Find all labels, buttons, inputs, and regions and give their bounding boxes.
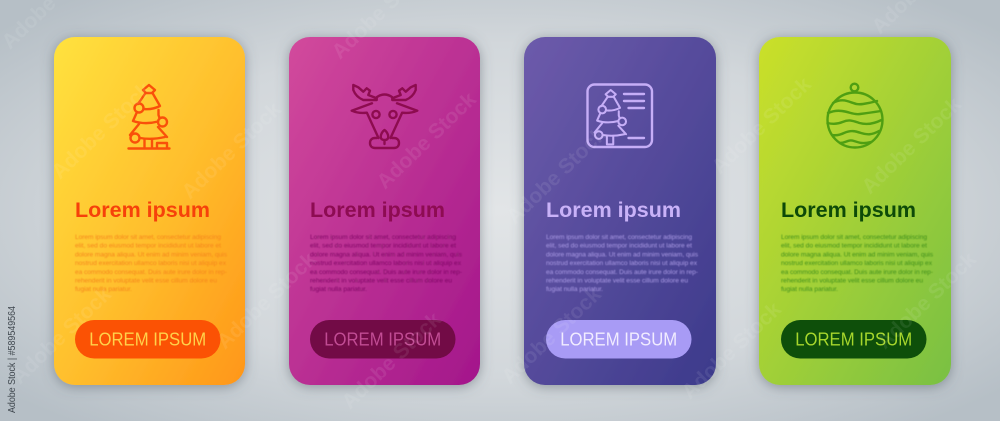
heading: Lorem ipsum <box>75 199 210 222</box>
text block: Lorem ipsum dolor sit amet, consectetur adipiscing <box>310 234 456 241</box>
text block: fugiat nulla pariatur. <box>75 286 132 293</box>
text block: elit, sed do eiusmod tempor incididunt ut labore et <box>781 243 927 250</box>
watermark: Adobe Stock pattern: Adobe Stock <box>372 88 481 194</box>
text block: elit, sed do eiusmod tempor incididunt ut labore et <box>75 243 221 250</box>
text block: nostrud exercitation ullamco laboris nisi ut aliquip ex <box>781 260 933 267</box>
button <box>75 320 220 358</box>
watermark: Adobe Stock pattern: Adobe Stock <box>857 93 966 199</box>
text block: dolore magna aliqua. Ut enim ad minim veniam, quis <box>546 251 699 258</box>
watermark: Adobe Stock pattern: Adobe Stock <box>47 78 156 184</box>
text block: ea commodo consequat. Duis aute irure dolor in rep- <box>546 269 698 276</box>
icon: christmas tree with gift <box>128 85 170 148</box>
text block: ea commodo consequat. Duis aute irure dolor in rep- <box>75 269 227 276</box>
watermark: Adobe Stock pattern: Adobe Stock <box>502 123 611 229</box>
heading: Lorem ipsum <box>310 199 445 222</box>
watermark: Adobe Stock pattern: Adobe Stock <box>707 73 816 179</box>
button: LOREM IPSUM <box>89 330 206 350</box>
panel: yellow card <box>54 37 245 385</box>
text block: fugiat nulla pariatur. <box>781 286 838 293</box>
icon: christmas card <box>588 84 652 147</box>
watermark: Adobe Stock pattern: Adobe Stock <box>177 98 286 204</box>
text block: ea commodo consequat. Duis aute irure dolor in rep- <box>781 269 933 276</box>
text block: Lorem ipsum dolor sit amet, consectetur adipiscing <box>546 234 692 241</box>
text block: elit, sed do eiusmod tempor incididunt ut labore et <box>310 243 456 250</box>
text block <box>546 234 699 293</box>
icon: christmas bauble <box>828 84 882 148</box>
button <box>310 320 456 358</box>
text block: rehenderit in voluptate velit esse cillum dolore eu <box>75 278 217 284</box>
text block: rehenderit in voluptate velit esse cillum dolore eu <box>310 278 452 284</box>
heading: Lorem ipsum <box>546 199 681 222</box>
button: LOREM IPSUM <box>324 330 441 350</box>
panel: indigo card <box>524 37 716 385</box>
text block: nostrud exercitation ullamco laboris nisi ut aliquip ex <box>546 260 698 267</box>
panel: magenta card <box>289 37 480 385</box>
text block <box>310 234 463 293</box>
button <box>781 320 926 358</box>
text block: dolore magna aliqua. Ut enim ad minim veniam, quis <box>310 251 463 258</box>
text block <box>781 234 934 293</box>
watermark: Adobe Stock pattern: Adobe Stock <box>497 283 606 389</box>
button: LOREM IPSUM <box>560 330 677 350</box>
panel: green card <box>759 37 951 385</box>
button: LOREM IPSUM <box>795 330 912 350</box>
text block: elit, sed do eiusmod tempor incididunt ut labore et <box>546 243 692 250</box>
text block: Lorem ipsum dolor sit amet, consectetur adipiscing <box>781 234 927 241</box>
watermark: Adobe Stock pattern: Adobe Stock <box>872 248 981 354</box>
text block: nostrud exercitation ullamco laboris nisi ut aliquip ex <box>75 260 227 267</box>
text block: nostrud exercitation ullamco laboris nisi ut aliquip ex <box>310 260 462 267</box>
watermark: Adobe Stock pattern: Adobe Stock <box>677 298 786 404</box>
text block: dolore magna aliqua. Ut enim ad minim veniam, quis <box>781 251 934 258</box>
watermark: Adobe Stock pattern: Adobe Stock <box>212 248 321 354</box>
stock id label: Adobe Stock | #589549564 <box>6 306 18 413</box>
text block <box>75 234 228 293</box>
text block: rehenderit in voluptate velit esse cillum dolore eu <box>781 278 923 284</box>
watermark: Adobe Stock pattern: Adobe Stock <box>7 283 116 389</box>
text block: dolore magna aliqua. Ut enim ad minim veniam, quis <box>75 251 228 258</box>
text block: ea commodo consequat. Duis aute irure dolor in rep- <box>310 269 462 276</box>
watermark: Adobe Stock pattern: Adobe Stock <box>337 308 446 414</box>
heading: Lorem ipsum <box>781 199 916 222</box>
icon: reindeer head <box>352 85 417 148</box>
button <box>546 320 692 358</box>
text block: Lorem ipsum dolor sit amet, consectetur adipiscing <box>75 234 221 241</box>
text block: fugiat nulla pariatur. <box>310 286 367 293</box>
text block: rehenderit in voluptate velit esse cillum dolore eu <box>546 278 688 284</box>
text block: fugiat nulla pariatur. <box>546 286 603 293</box>
